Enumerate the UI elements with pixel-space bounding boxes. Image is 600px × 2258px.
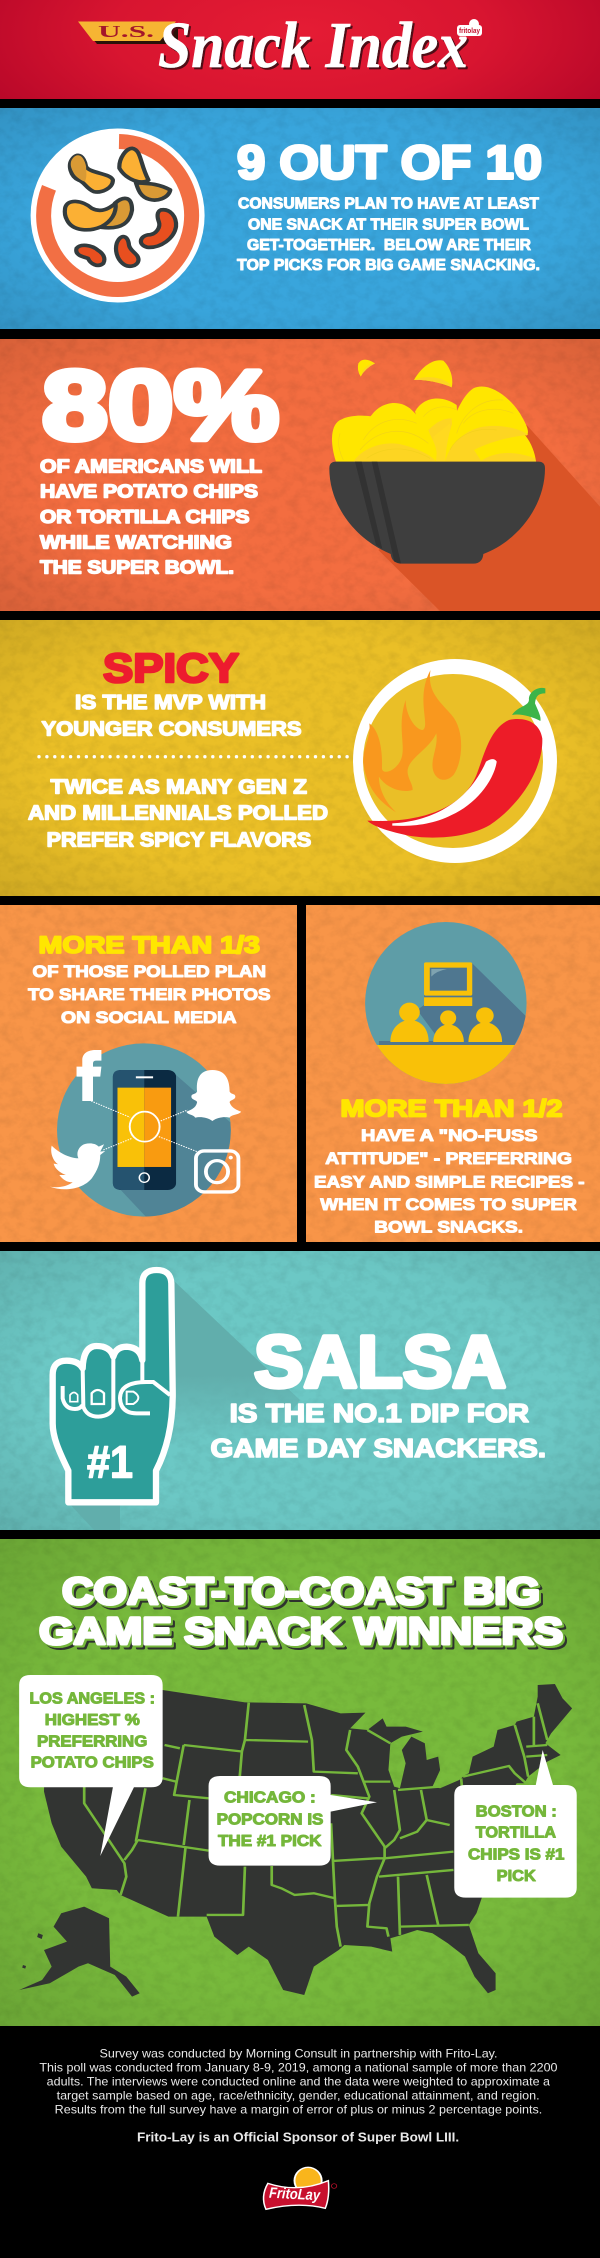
heading: 80%: 80% — [42, 350, 279, 460]
text block: social — [28, 962, 270, 1027]
header banner — [0, 0, 600, 99]
phone — [113, 1070, 176, 1190]
footer: survey note: This poll was conducted from January 8-9, 2019, among a national sample of more than 2200 — [39, 2061, 558, 2075]
callout: Boston: BOSTON : — [476, 1804, 557, 1821]
text block: MVP: YOUNGER CONSUMERS — [42, 718, 302, 740]
callout shapes — [19, 1675, 577, 1898]
heading: coast-to-coast: COAST-TO-COAST BIG — [62, 1571, 540, 1613]
map: United States — [19, 1675, 577, 1997]
text block: consumers: GET-TOGETHER. BELOW ARE THEIR — [247, 237, 531, 254]
footer: survey note: target sample based on age, race/ethnicity, gender, educational attainment, and region. — [57, 2089, 540, 2103]
heading: more than 1/2: MORE THAN 1/2 — [340, 1096, 562, 1122]
panel: coast-to-coast map — [0, 1539, 600, 2026]
panel: no-fuss attitude — [306, 905, 600, 1242]
icon: facebook — [77, 1050, 101, 1101]
small Frito-Lay logo — [457, 19, 482, 36]
panel: share photos — [0, 905, 297, 1242]
text block: Gen Z — [28, 776, 328, 851]
text block: no-fuss — [314, 1126, 584, 1237]
footer: survey note — [39, 2047, 558, 2117]
logo: Frito-Lay: FritoLay — [269, 2185, 321, 2204]
callout: Chicago: CHICAGO : — [224, 1790, 316, 1807]
finger long shadow — [66, 1280, 300, 1530]
panel: 80 percent — [0, 339, 600, 611]
callout: Boston: PICK — [497, 1868, 537, 1885]
heading: salsa: SALSA — [254, 1322, 506, 1403]
heading: coast-to-coast — [39, 1571, 563, 1653]
text block: MVP — [42, 692, 302, 740]
footer: survey note: Survey was conducted by Morning Consult in partnership with Frito-Lay. — [100, 2047, 498, 2061]
heading: more than 1/3: MORE THAN 1/3 — [38, 932, 260, 959]
panel: 9 out of 10 — [0, 108, 600, 329]
text block: consumers — [237, 196, 540, 274]
text block: dip: IS THE NO.1 DIP FOR — [230, 1398, 529, 1428]
text block: no-fuss: ATTITUDE" - PREFERRING — [325, 1149, 572, 1168]
U.S. gold ribbon: U.S. — [98, 22, 154, 41]
chips — [332, 360, 536, 462]
icon: twitter — [50, 1143, 105, 1189]
text block: consumers: TOP PICKS FOR BIG GAME SNACKING. — [237, 257, 540, 274]
bowl shadow — [378, 425, 600, 611]
callout: Los Angeles: POTATO CHIPS — [31, 1755, 154, 1772]
icon: snapchat — [186, 1070, 241, 1121]
callout: Chicago — [217, 1790, 323, 1850]
callout: Boston: CHIPS IS #1 — [468, 1846, 565, 1863]
text block: dip: GAME DAY SNACKERS. — [210, 1433, 546, 1463]
text block: MVP: IS THE MVP WITH — [75, 692, 266, 714]
footer: survey note: adults. The interviews were conducted online and the data were weighted to approximate a — [47, 2075, 550, 2089]
callout: Boston — [468, 1804, 565, 1885]
text block: Americans: WHILE WATCHING — [40, 531, 232, 552]
text block: social: OF THOSE POLLED PLAN — [32, 962, 266, 981]
text block: Americans: OF AMERICANS WILL — [40, 456, 262, 476]
logo: Frito-Lay — [264, 2167, 337, 2209]
text block: dip — [210, 1398, 546, 1463]
icon: bowl of chips — [329, 360, 600, 611]
map: Alaska — [19, 1907, 140, 1997]
callout: Chicago: POPCORN IS — [217, 1811, 323, 1828]
text block: Gen Z: TWICE AS MANY GEN Z — [50, 776, 307, 798]
U.S. gold ribbon — [78, 22, 178, 44]
icon: phone and social networks — [50, 1043, 241, 1218]
callout: Boston: TORTILLA — [476, 1825, 556, 1842]
footer: sponsor line: Frito-Lay is an Official Sponsor of Super Bowl LIII. — [137, 2130, 459, 2145]
icon: snack plate — [31, 128, 205, 302]
small Frito-Lay logo: fritolay — [459, 28, 480, 35]
text block: Americans: THE SUPER BOWL. — [40, 557, 234, 578]
panel: spicy — [0, 620, 600, 896]
callout: Los Angeles: HIGHEST % — [45, 1712, 140, 1729]
callout: Los Angeles — [30, 1690, 155, 1772]
panel: salsa — [0, 1251, 600, 1530]
label on finger: #1: #1 — [87, 1436, 133, 1488]
text block: no-fuss: EASY AND SIMPLE RECIPES - — [314, 1172, 584, 1191]
text block: social: TO SHARE THEIR PHOTOS — [28, 985, 270, 1004]
heading: 9 out of 10: 9 OUT OF 10 — [237, 136, 542, 188]
footer: survey note: Results from the full survey have a margin of error of plus or minus 2 percentage points. — [55, 2103, 542, 2117]
text block: no-fuss: WHEN IT COMES TO SUPER — [320, 1195, 577, 1214]
text block: consumers: CONSUMERS PLAN TO HAVE AT LEAST — [238, 196, 540, 212]
text block: Gen Z: AND MILLENNIALS POLLED — [28, 802, 328, 824]
text block: social: ON SOCIAL MEDIA — [61, 1008, 236, 1027]
bowl — [329, 462, 545, 564]
title: Snack Index: Snack Index — [158, 9, 468, 82]
text block: no-fuss: BOWL SNACKS. — [374, 1218, 523, 1237]
text block: no-fuss: HAVE A "NO-FUSS — [361, 1126, 538, 1145]
callout: Los Angeles: LOS ANGELES : — [30, 1690, 155, 1707]
text block: Americans: OR TORTILLA CHIPS — [40, 506, 250, 527]
icon: chili and flame — [353, 659, 557, 863]
icon: audience watching screen — [364, 922, 528, 1088]
text block: Americans — [40, 456, 262, 578]
heading: SPICY: SPICY — [103, 645, 239, 691]
text block: consumers: ONE SNACK AT THEIR SUPER BOWL — [248, 216, 529, 234]
callout: Chicago: THE #1 PICK — [218, 1833, 322, 1850]
icon: instagram — [196, 1151, 238, 1192]
text block: Gen Z: PREFER SPICY FLAVORS — [47, 829, 311, 851]
callout: Los Angeles: PREFERRING — [37, 1734, 147, 1751]
text block: Americans: HAVE POTATO CHIPS — [40, 480, 258, 502]
heading: coast-to-coast: GAME SNACK WINNERS — [39, 1611, 563, 1653]
icon: foam finger — [53, 1270, 173, 1502]
